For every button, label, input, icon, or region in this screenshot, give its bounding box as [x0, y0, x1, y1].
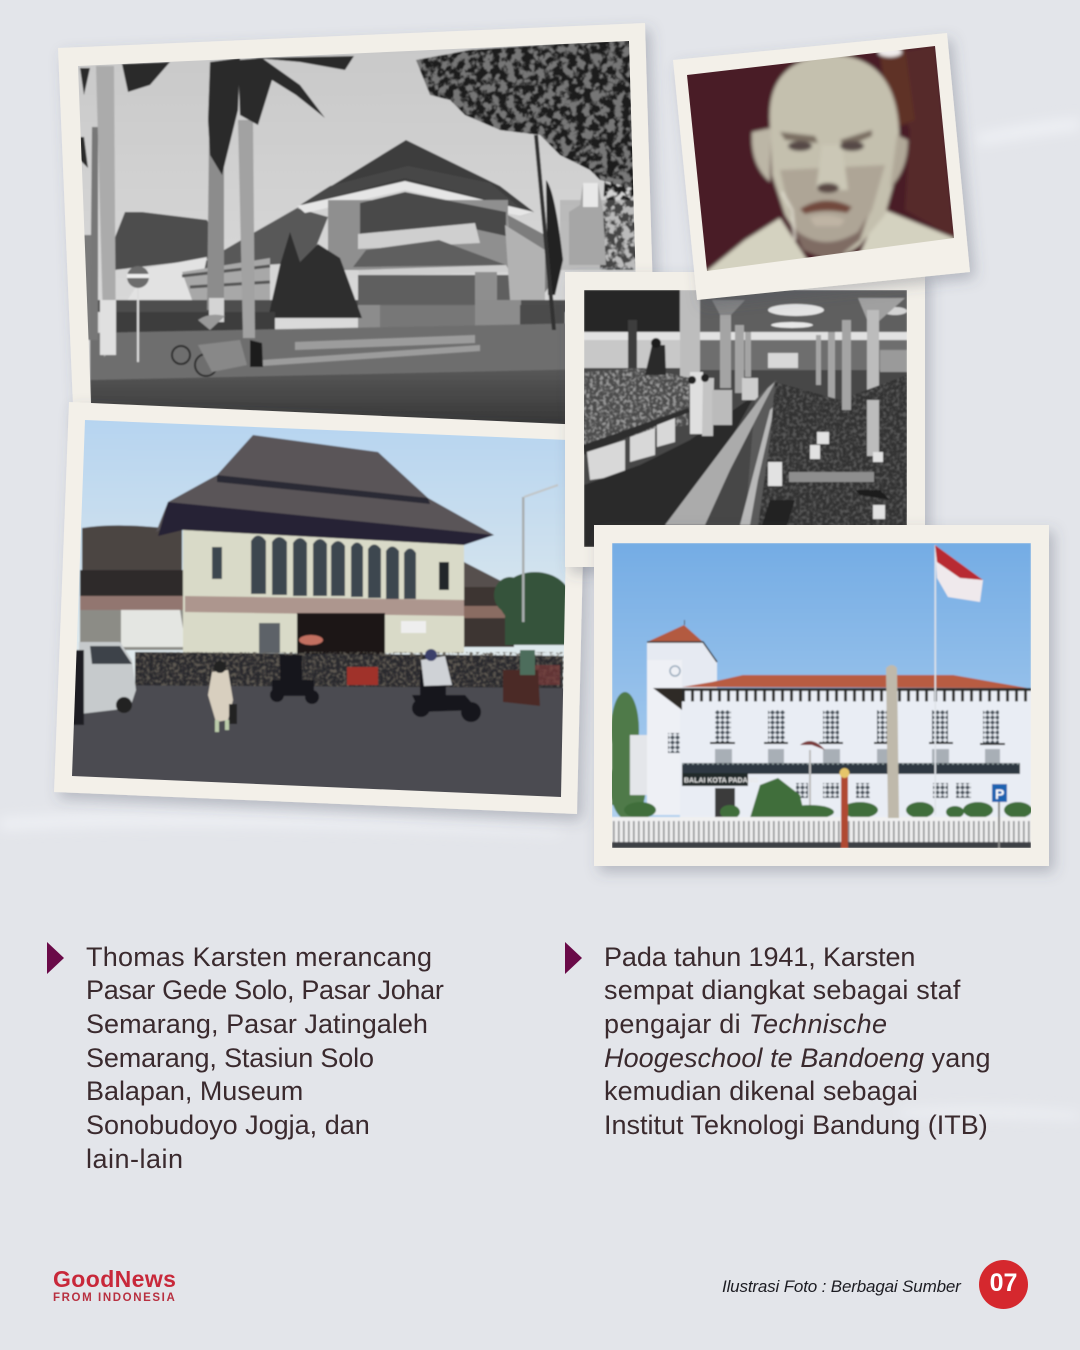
- text block: Karsten's works: lain-lain: [86, 1144, 184, 1174]
- photo: Balai Kota Padang with flag: P: [995, 786, 1004, 802]
- text block: Karsten's works: Sonobudoyo Jogja, dan: [86, 1110, 370, 1140]
- logo: GoodNews from Indonesia: GoodNews: [53, 1266, 176, 1292]
- photo: Pasar Gede market interior (black and white): [565, 272, 925, 567]
- page number badge: 07: [990, 1269, 1017, 1297]
- bullet marker right: [565, 942, 582, 974]
- text block: teaching at Technische Hoogeschool: pengajar di Technische: [604, 1009, 887, 1039]
- text block: Karsten's works: [86, 942, 444, 1174]
- logo: GoodNews from Indonesia: FROM INDONESIA: [53, 1292, 176, 1304]
- text block: Karsten's works: Semarang, Pasar Jatingaleh: [86, 1009, 428, 1039]
- photo credit: Ilustrasi Foto : Berbagai Sumber: [722, 1277, 961, 1296]
- photo: portrait of Thomas Karsten: [673, 33, 970, 300]
- text block: teaching at Technische Hoogeschool: sempat diangkat sebagai staf: [604, 975, 961, 1005]
- page number badge: [979, 1260, 1028, 1309]
- photo: Pasar Johar colour photo with large tiered roof: [54, 402, 586, 814]
- text block: teaching at Technische Hoogeschool: [604, 942, 991, 1140]
- text block: teaching at Technische Hoogeschool: kemudian dikenal sebagai: [604, 1076, 918, 1106]
- bullet marker left: [47, 942, 64, 974]
- photo: Balai Kota Padang with flag: BALAI KOTA PADANG: [684, 778, 759, 784]
- logo: GoodNews from Indonesia: [53, 1266, 176, 1304]
- text block: Karsten's works: Pasar Gede Solo, Pasar Johar: [86, 975, 444, 1005]
- text block: Karsten's works: Thomas Karsten merancang: [86, 942, 432, 972]
- text block: teaching at Technische Hoogeschool: Institut Teknologi Bandung (ITB): [604, 1110, 988, 1140]
- photo: colonial building with palm trees (black and white): [58, 23, 657, 435]
- text block: Karsten's works: Semarang, Stasiun Solo: [86, 1043, 374, 1073]
- photo: Balai Kota Padang with flag: [594, 525, 1049, 866]
- text block: teaching at Technische Hoogeschool: Pada tahun 1941, Karsten: [604, 942, 915, 972]
- text block: Karsten's works: Balapan, Museum: [86, 1076, 303, 1106]
- text block: teaching at Technische Hoogeschool: Hoogeschool te Bandoeng yang: [604, 1043, 991, 1073]
